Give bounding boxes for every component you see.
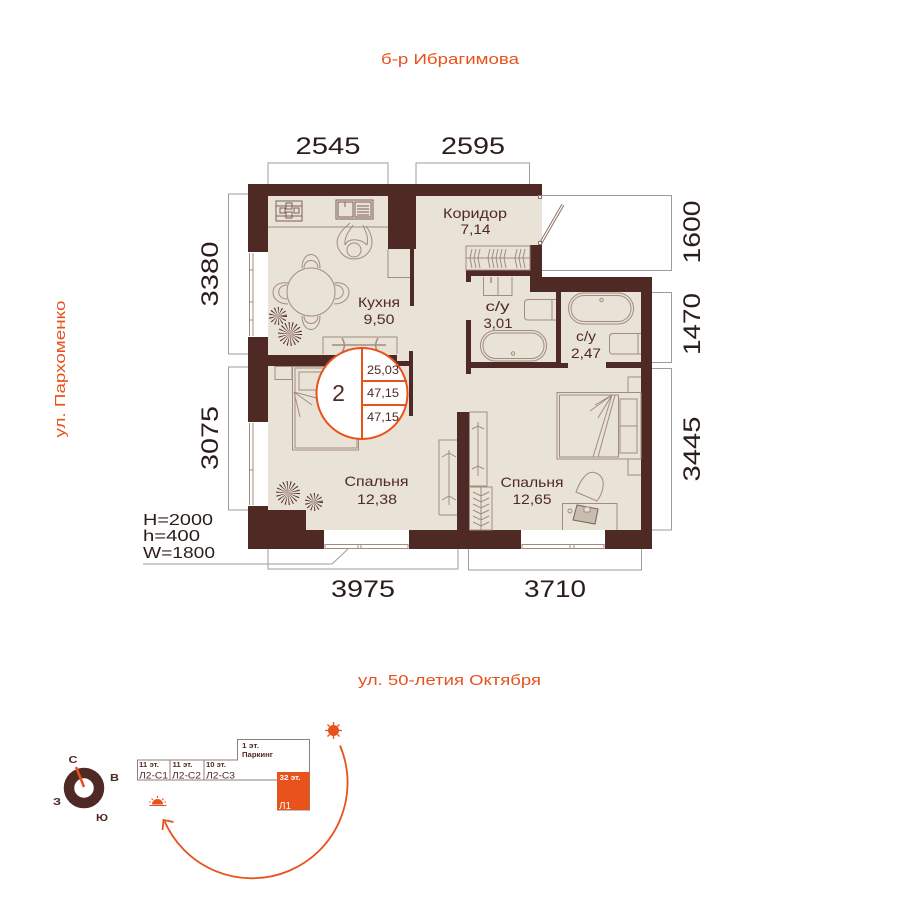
room labels: 12,38 <box>357 491 397 507</box>
plants <box>274 312 318 506</box>
window spec callout: W=1800 <box>143 545 215 562</box>
bathroom 1 fixtures <box>480 277 556 361</box>
bathroom 2 fixtures <box>568 293 641 354</box>
compass: С <box>68 755 78 766</box>
building key plan: Л2-С2 <box>172 770 201 782</box>
building key plan: Паркинг <box>242 752 273 759</box>
dimension lines <box>228 163 672 570</box>
apartment badge: 2 <box>332 380 345 406</box>
building key plan: 1 эт. <box>242 743 259 750</box>
icon: sunset <box>149 796 166 806</box>
building key plan <box>138 740 310 812</box>
cabinet <box>388 249 410 278</box>
building key plan: 10 эт. <box>206 762 226 769</box>
dimension numbers: 2595 <box>441 133 505 160</box>
room labels: 7,14 <box>460 221 491 237</box>
left bedroom furniture <box>275 366 457 515</box>
room labels: Спальня <box>344 473 408 489</box>
street label: left: ул. Пархоменко <box>52 300 69 438</box>
building key plan: Л2-С1 <box>139 770 168 782</box>
dimension numbers: 3075 <box>197 406 224 470</box>
corridor wardrobe <box>466 246 530 270</box>
window openings <box>248 252 605 549</box>
window spec callout: h=400 <box>143 528 200 545</box>
room labels: Спальня <box>500 474 564 490</box>
apartment badge: 25,03 <box>367 365 399 377</box>
dimension numbers: 1470 <box>679 293 706 355</box>
table and chairs <box>273 254 349 330</box>
window spec callout <box>143 512 348 564</box>
dimension numbers: 1600 <box>679 200 706 264</box>
windows <box>250 253 604 548</box>
compass: З <box>53 797 61 808</box>
room labels <box>344 205 601 507</box>
right bedroom furniture <box>470 377 641 530</box>
dimension numbers: 3975 <box>331 576 395 603</box>
apartment badge <box>316 348 408 439</box>
floor <box>248 184 652 549</box>
street label: top: б-р Ибрагимова <box>381 51 520 68</box>
room labels: Коридор <box>443 205 507 221</box>
room labels: 3,01 <box>484 315 513 331</box>
compass: Ю <box>96 813 108 824</box>
compass <box>53 755 119 824</box>
apartment badge: 47,15 <box>367 412 399 424</box>
walls <box>248 184 542 252</box>
entrance door <box>538 196 564 244</box>
window spec callout: H=2000 <box>143 512 213 529</box>
room labels: 12,65 <box>512 491 552 507</box>
arrow: sun path <box>162 746 348 878</box>
building key plan: 32 эт. <box>280 775 301 782</box>
dimension numbers: 3445 <box>679 416 706 482</box>
floor plan <box>248 184 652 549</box>
icon: sun <box>325 722 342 739</box>
sink <box>336 200 373 219</box>
apartment badge: 47,15 <box>367 388 399 400</box>
room labels: Кухня <box>358 294 400 310</box>
room labels: 9,50 <box>364 311 395 327</box>
room labels: с/у <box>486 298 510 314</box>
room labels: с/у <box>576 328 596 344</box>
person <box>337 223 372 259</box>
counter <box>268 226 388 228</box>
dimension numbers: 3710 <box>524 576 586 603</box>
building key plan: 11 эт. <box>172 762 193 769</box>
building key plan: Л2-С3 <box>206 770 235 782</box>
stove <box>276 201 302 221</box>
building key plan: Л1 <box>279 801 291 812</box>
kitchen furniture <box>268 200 410 354</box>
room labels: 2,47 <box>571 345 601 361</box>
dimension numbers: 2545 <box>296 133 360 160</box>
dimension numbers: 3380 <box>197 242 224 306</box>
street label: bottom: ул. 50-летия Октября <box>358 672 541 689</box>
dimension numbers <box>197 133 706 603</box>
building key plan: 11 эт. <box>139 762 159 769</box>
compass: В <box>110 773 119 784</box>
wardrobe <box>323 337 397 354</box>
